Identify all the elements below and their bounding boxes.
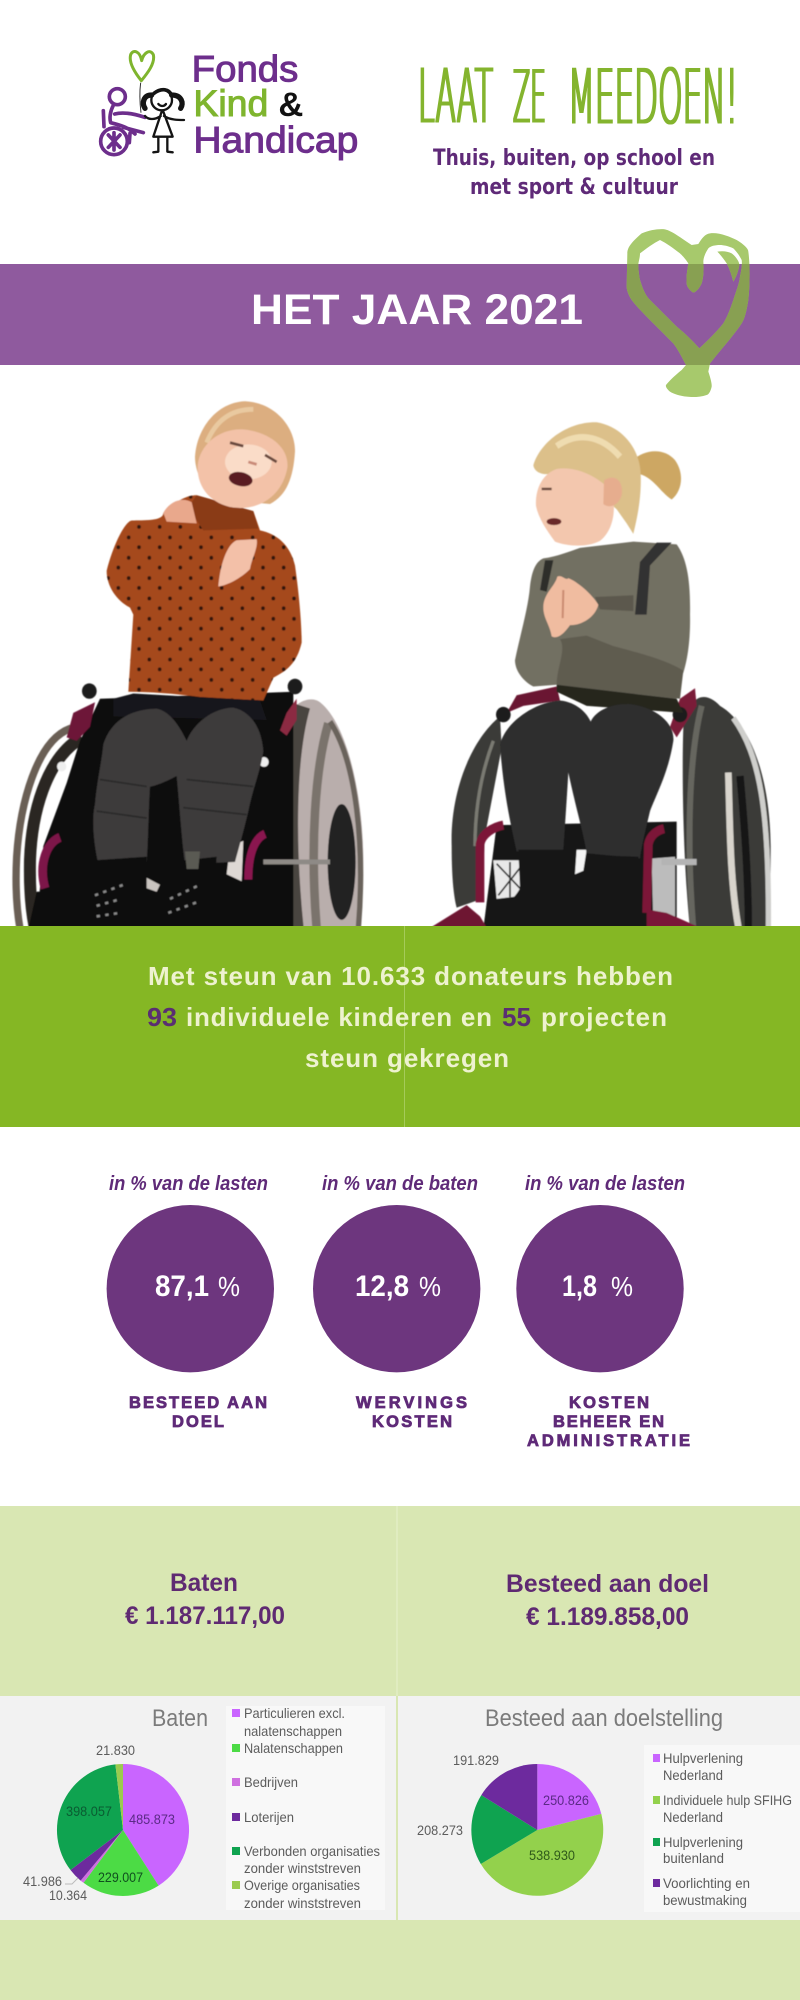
stat: wervingskosten: % [419,1271,441,1302]
wordmark: Handicap: Handicap [193,118,358,160]
photo: girl in grey sweater [432,422,771,929]
chart panel: besteed aan doelstelling [398,1696,800,1920]
tagline: met sport & cultuur [470,175,678,200]
text: donor message [147,961,673,1073]
legend: besteed aan doelstelling: Nederland [663,1767,723,1783]
pie chart: besteed aan doelstelling [417,1752,603,1896]
text: donor message: 93 [147,1002,177,1032]
pie chart: baten: 229.007 [98,1869,143,1885]
tagline: Thuis, buiten, op school en [433,146,715,171]
pie chart: baten: 21.830 [96,1742,135,1758]
pie chart: baten: 41.986 [23,1873,62,1889]
text: besteed aan doel total: Besteed aan doel [506,1570,709,1598]
stat: wervingskosten: in % van de baten [322,1173,478,1195]
hands [543,576,598,637]
text: donor message: steun gekregen [305,1043,509,1073]
slogan: Laat ze meedoen: LAAT [418,54,493,140]
pie chart: baten: 398.057 [66,1803,112,1819]
text: baten total: € 1.187.117,00 [125,1602,285,1630]
hair [533,422,641,534]
chair frame [37,692,293,929]
stat: wervingskosten: WERVINGS [356,1394,467,1412]
right wheel [683,697,771,929]
legend: baten: Bedrijven [244,1774,298,1790]
hands [163,500,197,523]
text: besteed aan doel total [506,1570,709,1631]
text: besteed aan doel total: € 1.189.858,00 [526,1603,689,1631]
face [536,468,614,546]
slogan: Laat ze meedoen [418,53,738,141]
stat: kosten beheer en administratie: 1,8 [562,1270,597,1303]
stat: kosten beheer en administratie: ADMINISTRATIE [527,1432,690,1450]
legend: baten: Verbonden organisaties [244,1843,380,1859]
legend: besteed aan doelstelling: Hulpverlening [663,1750,743,1766]
text: baten total: Baten [170,1569,238,1597]
legend: baten: Nalatenschappen [244,1740,343,1756]
legend: baten: zonder winststreven [244,1895,361,1911]
panel: light green totals [0,1506,800,2000]
pie chart: besteed aan doelstelling: 191.829 [453,1752,499,1768]
legend: baten: nalatenschappen [244,1723,342,1739]
text: donor message: projecten [541,1002,667,1032]
photo: two children in wheelchairs [16,401,771,929]
legend: baten: Loterijen [244,1809,294,1825]
chair frame and spokes [483,822,677,929]
legend: besteed aan doelstelling: bewustmaking [663,1892,747,1908]
pie chart: besteed aan doelstelling: 208.273 [417,1822,463,1838]
stat: wervingskosten: KOSTEN [372,1413,452,1431]
stat: besteed aan doel: % [218,1271,240,1302]
tagline [433,146,715,200]
text: donor message: Met steun van 10.633 donateurs hebben [148,961,673,991]
icon: girl with pigtails [143,90,184,152]
chart panel: baten [0,1696,396,1920]
legend: besteed aan doelstelling: buitenland [663,1850,724,1866]
boots [514,850,548,898]
stat: kosten beheer en administratie: in % van de lasten [525,1173,685,1195]
pie chart: baten [23,1742,189,1903]
face [198,429,287,508]
icon: large green heart [627,229,750,397]
grey sweater [515,542,690,699]
jeans [500,701,673,858]
legend: baten: zonder winststreven [244,1860,361,1876]
heading: het jaar 2021: HET JAAR 2021 [251,286,583,334]
slogan: Laat ze meedoen: ZE [513,55,546,139]
banner: het jaar 2021 [0,264,800,365]
icon: child in wheelchair [101,89,145,155]
stat: besteed aan doel: BESTEED AAN [129,1394,267,1412]
dark skirt [113,694,267,720]
stat: kosten beheer en administratie [516,1173,690,1450]
pie chart: besteed aan doelstelling: 250.826 [543,1792,589,1808]
wordmark: ampersand: & [278,86,303,124]
chart title: baten: Baten [152,1705,208,1732]
legend: baten: Overige organisaties [244,1877,360,1893]
text: donor message: 55 [502,1002,531,1032]
legend: baten [226,1705,385,1911]
wordmark: Kind: Kind [193,82,268,124]
logo: Fonds Kind & Handicap [101,48,358,160]
left wheel [452,716,502,908]
stat: kosten beheer en administratie: % [611,1271,633,1302]
stat: besteed aan doel [107,1173,274,1431]
stat: wervingskosten [313,1173,480,1431]
stat: kosten beheer en administratie: KOSTEN [569,1394,649,1412]
photo: girl in orange sweater [16,401,363,929]
legend: besteed aan doelstelling: Nederland [663,1809,723,1825]
text: baten total [125,1569,285,1630]
icon: heart balloon [130,51,154,81]
jeans [93,708,263,864]
legend: baten: Particulieren excl. [244,1705,345,1721]
pie chart: baten: 10.364 [49,1887,87,1903]
wordmark: Fonds: Fonds [192,48,298,90]
left wheel [16,729,77,929]
chart title: besteed aan doelstelling: Besteed aan doelstelling [485,1705,723,1732]
icon: balloon string [140,83,141,113]
orange sweater [107,495,302,701]
legend: besteed aan doelstelling: Hulpverlening [663,1834,743,1850]
text: donor message: individuele kinderen en [186,1002,492,1032]
pie chart: baten: 485.873 [129,1811,175,1827]
hair [195,401,295,504]
boots [96,856,148,864]
right wheel [283,699,363,929]
panel: green donor message [0,926,800,1127]
stat: besteed aan doel: DOEL [172,1413,224,1431]
stat: besteed aan doel: in % van de lasten [109,1173,268,1195]
pigtail [630,451,681,499]
stat: wervingskosten: 12,8 [355,1270,409,1303]
legend: besteed aan doelstelling [644,1745,800,1912]
legend: besteed aan doelstelling: Voorlichting en [663,1875,750,1891]
stat: besteed aan doel: 87,1 [155,1270,209,1303]
icon: heart overlap on banner [626,264,750,365]
pie chart: besteed aan doelstelling: 538.930 [529,1847,575,1863]
stat: kosten beheer en administratie: BEHEER EN [553,1413,664,1431]
